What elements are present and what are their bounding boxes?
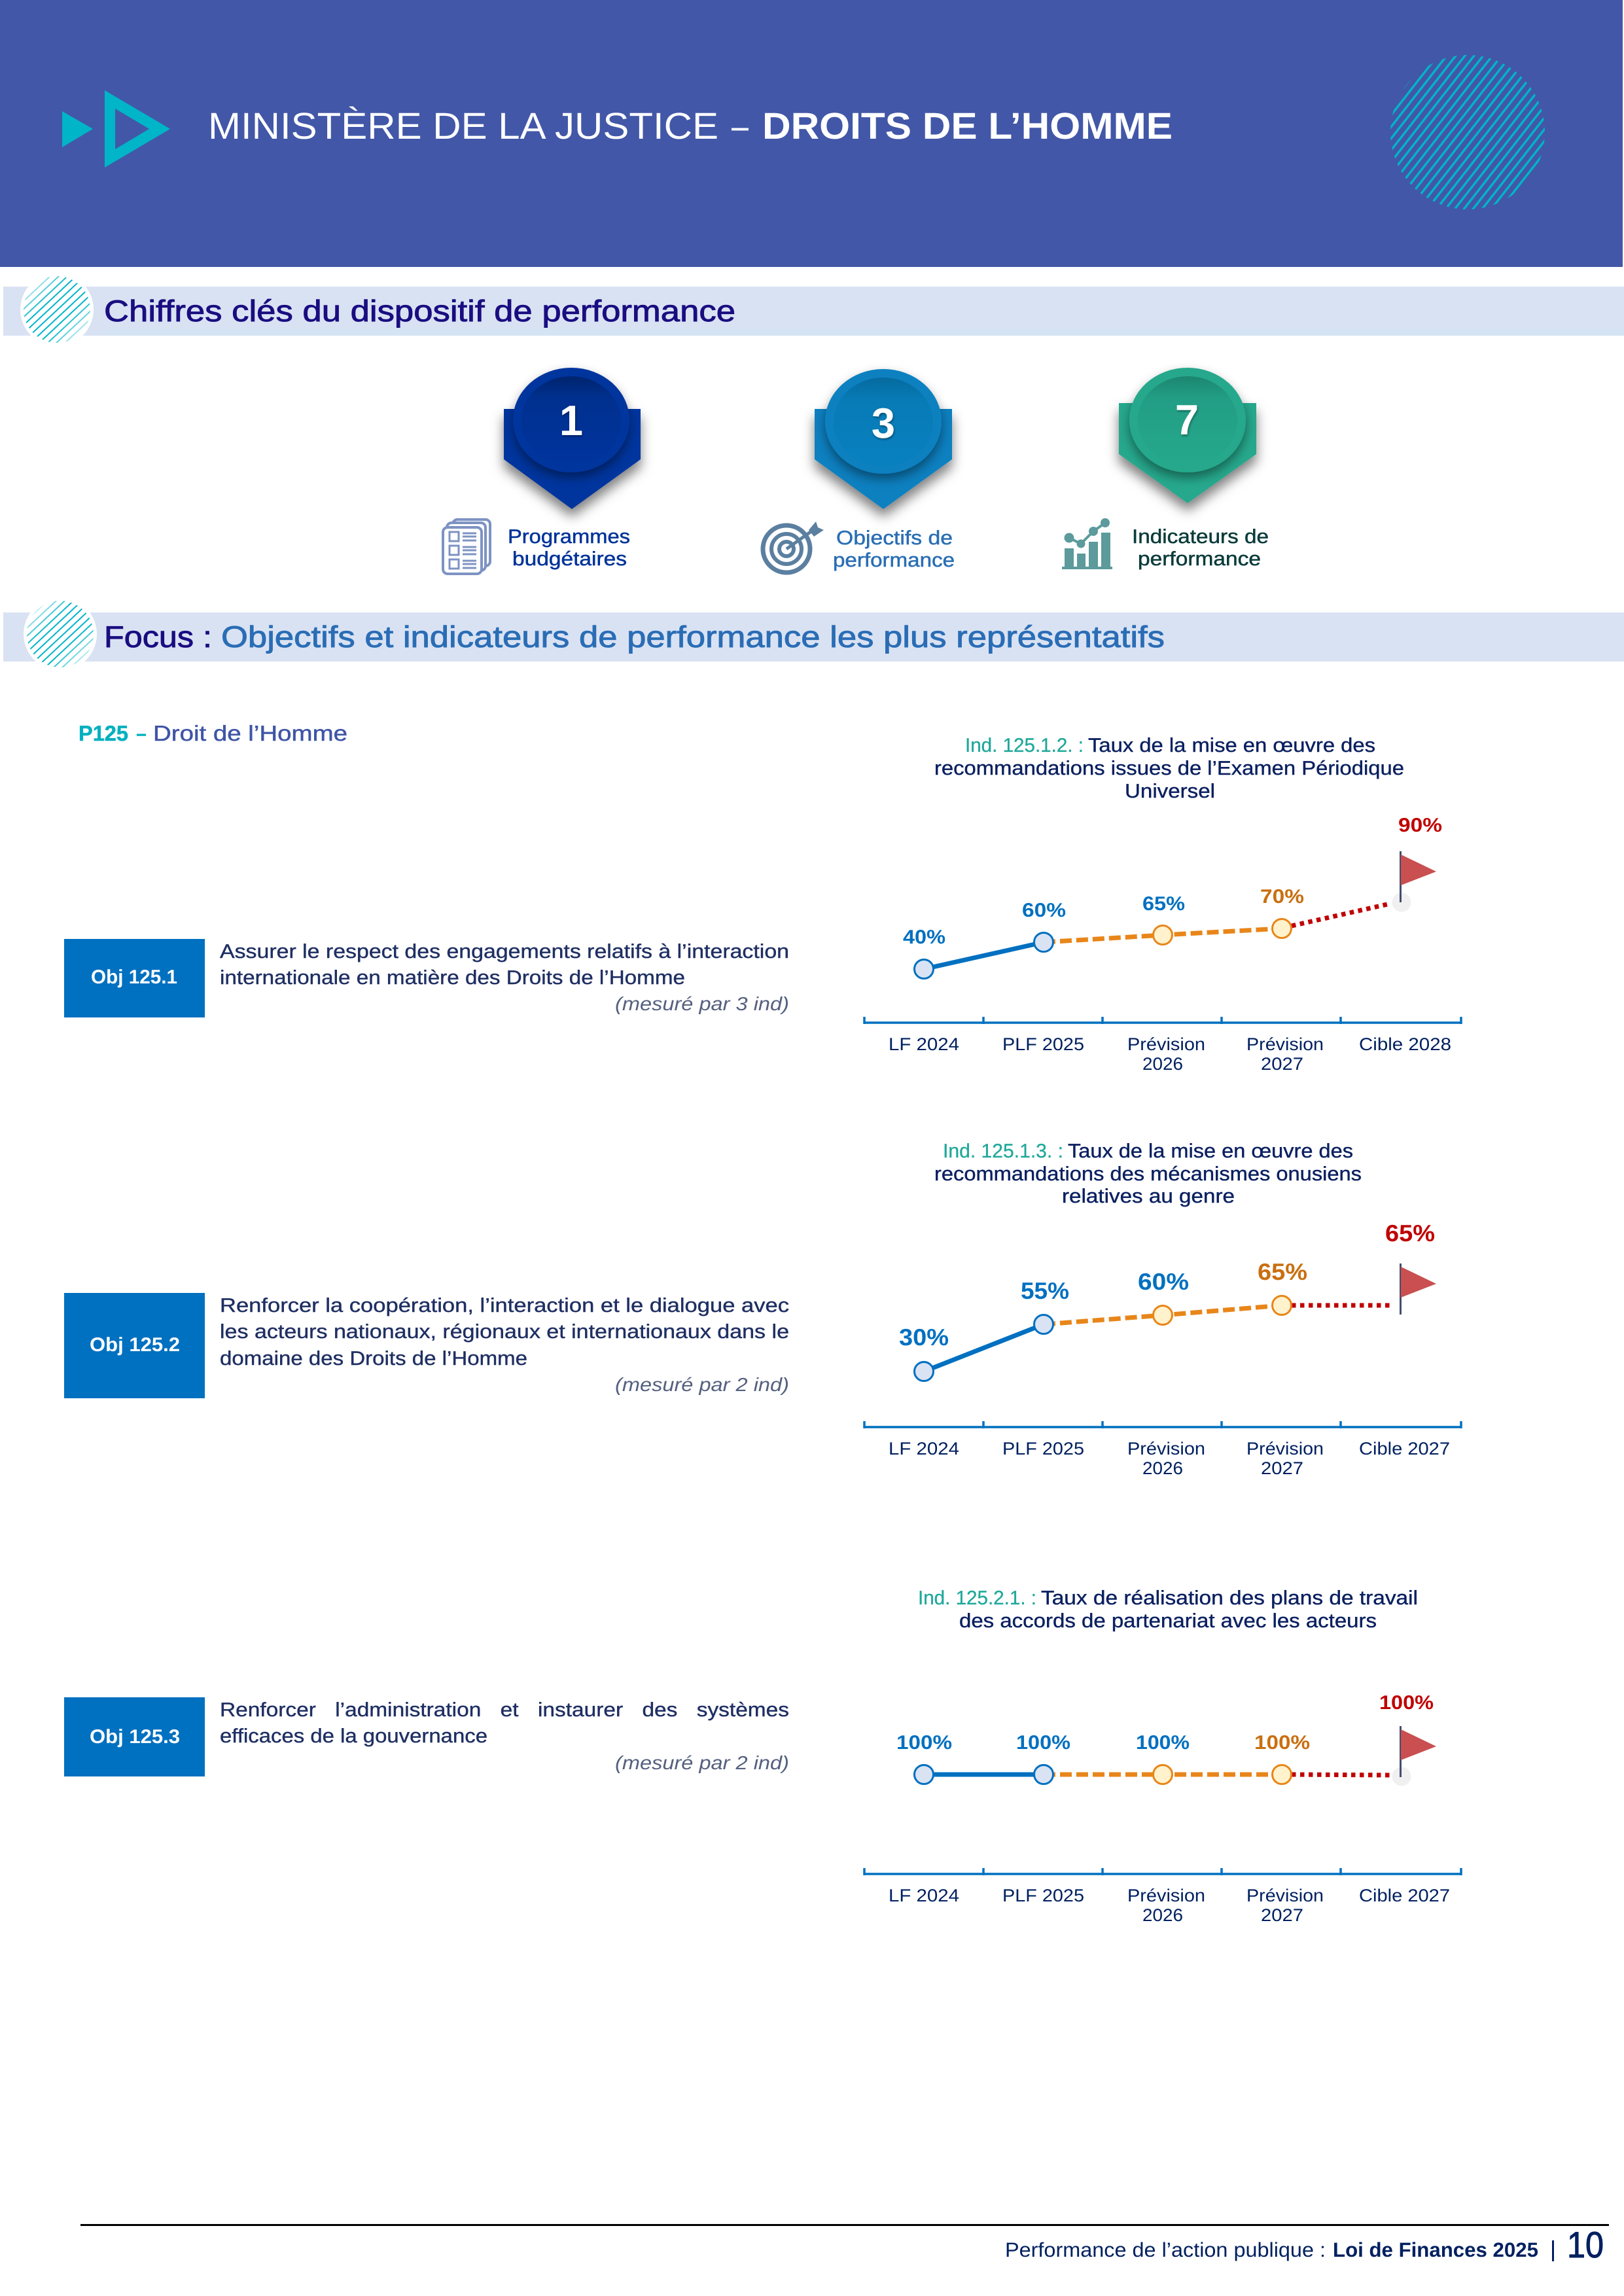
x axis: 2027 <box>1261 1458 1303 1478</box>
x axis: Prévision <box>1246 1034 1324 1054</box>
chart title <box>934 1140 1362 1207</box>
chart title: Taux de la mise en œuvre des <box>1068 1140 1353 1162</box>
chart title: Ind. 125.1.3. : <box>943 1140 1063 1162</box>
x axis: Cible 2028 <box>1359 1034 1451 1054</box>
section band: focus <box>3 597 1624 671</box>
x axis: Prévision <box>1127 1034 1205 1054</box>
objective text: Renforcer l’administration et instaurer des systèmes <box>220 1699 789 1721</box>
x axis: LF 2024 <box>889 1034 959 1054</box>
heading: Chiffres clés du dispositif de performance <box>104 294 735 328</box>
chart title: recommandations des mécanismes onusiens <box>934 1163 1362 1185</box>
x axis: Prévision <box>1246 1439 1324 1458</box>
badge: 7 indicateurs: 7 <box>1175 396 1199 444</box>
x axis: PLF 2025 <box>1002 1439 1084 1458</box>
programme heading: – <box>136 721 147 745</box>
value labels <box>899 1220 1435 1351</box>
value labels: 100% <box>896 1732 952 1754</box>
heading: Objectifs et indicateurs de performance les plus représentatifs <box>221 620 1165 654</box>
programme heading <box>79 721 347 745</box>
label: indicateurs de performance <box>1132 526 1269 570</box>
label: indicateurs de performance: Indicateurs de <box>1132 526 1269 548</box>
panel: objective 125.1: Obj 125.1 <box>91 966 177 988</box>
chart title <box>918 1587 1418 1632</box>
objective text: Renforcer la coopération, l’interaction et le dialogue avec <box>220 1295 789 1316</box>
data points <box>915 919 1292 979</box>
objective text <box>220 1699 789 1774</box>
x axis: PLF 2025 <box>1002 1886 1084 1905</box>
x axis <box>864 1017 1462 1074</box>
x axis: Cible 2027 <box>1359 1886 1450 1905</box>
x axis: LF 2024 <box>889 1886 959 1905</box>
icon: target <box>763 521 824 573</box>
value labels: 70% <box>1260 886 1304 908</box>
panel: objective 125.2 <box>64 1293 789 1398</box>
value labels: 60% <box>1138 1268 1189 1295</box>
page number: 10 <box>1567 2224 1604 2265</box>
objective text: efficaces de la gouvernance <box>220 1725 487 1747</box>
panel: objective 125.3 <box>64 1697 789 1776</box>
header banner <box>0 0 1623 267</box>
x axis: 2026 <box>1142 1054 1183 1074</box>
title: – <box>732 105 749 147</box>
chart title: Taux de réalisation des plans de travail <box>1041 1587 1418 1609</box>
chart title: Taux de la mise en œuvre des <box>1088 735 1375 756</box>
value labels: 90% <box>1398 815 1442 836</box>
icon: target flag <box>1400 1263 1436 1315</box>
label: programmes budgétaires: budgétaires <box>512 548 627 570</box>
footer: Performance de l’action publique : <box>1005 2238 1326 2261</box>
label: programmes budgétaires: Programmes <box>508 526 630 548</box>
badge: 1 programme: 1 <box>559 397 583 444</box>
objective text: domaine des Droits de l’Homme <box>220 1348 527 1369</box>
icon: hatched disc <box>24 597 97 671</box>
icon: hatched circle <box>1390 55 1545 209</box>
badge: 3 objectifs: 3 <box>872 399 895 447</box>
line series <box>924 1767 1411 1786</box>
x axis: 2026 <box>1142 1905 1183 1925</box>
value labels <box>903 815 1442 948</box>
value labels: 65% <box>1258 1258 1307 1285</box>
label: objectifs de performance <box>833 527 955 571</box>
x axis: Cible 2027 <box>1359 1439 1450 1458</box>
value labels: 65% <box>1385 1220 1435 1246</box>
label: indicateurs de performance: performance <box>1138 548 1261 570</box>
value labels: 55% <box>1021 1277 1069 1304</box>
x axis: 2026 <box>1142 1458 1183 1478</box>
chart title: Ind. 125.1.2. : <box>965 735 1084 756</box>
x axis: PLF 2025 <box>1002 1034 1084 1054</box>
x axis: Prévision <box>1127 1886 1205 1905</box>
icon: target flag <box>1400 1726 1436 1777</box>
panel: objective 125.2: Obj 125.2 <box>90 1334 180 1356</box>
data points <box>915 1765 1292 1784</box>
objective text: Assurer le respect des engagements relatifs à l’interaction <box>220 941 789 963</box>
value labels: 65% <box>1142 893 1185 915</box>
objective text: (mesuré par 2 ind) <box>615 1753 789 1774</box>
value labels: 100% <box>1016 1732 1070 1754</box>
value labels: 100% <box>1254 1732 1310 1754</box>
panel: objective 125.3: Obj 125.3 <box>90 1726 180 1748</box>
icon: bar chart with trend <box>1062 518 1112 569</box>
label: objectifs de performance: Objectifs de <box>836 527 953 549</box>
programme heading: Droit de l’Homme <box>153 721 347 745</box>
line series <box>924 892 1411 969</box>
label: programmes budgétaires <box>508 526 630 570</box>
badge: 7 indicateurs <box>1119 368 1256 503</box>
panel: objective 125.1 <box>64 939 789 1017</box>
line series <box>924 1305 1394 1371</box>
objective text <box>220 941 789 1015</box>
title: DROITS DE L’HOMME <box>762 105 1173 147</box>
icon: hatched disc <box>20 273 94 346</box>
icon: play arrows <box>62 90 170 168</box>
icon: target flag <box>1400 851 1436 902</box>
chart title <box>934 735 1404 802</box>
x axis: Prévision <box>1246 1886 1324 1905</box>
data points <box>915 1296 1292 1381</box>
objective text: internationale en matière des Droits de l’Homme <box>220 967 685 989</box>
icon: documents checklist <box>443 520 490 574</box>
objective text <box>220 1295 789 1396</box>
footer: Loi de Finances 2025 <box>1333 2238 1538 2261</box>
heading: Focus : <box>104 620 212 654</box>
chart: indicator 125.1.3 <box>864 1140 1462 1478</box>
chart title: des accords de partenariat avec les acteurs <box>959 1610 1377 1632</box>
value labels <box>896 1692 1434 1754</box>
value labels: 60% <box>1022 900 1066 921</box>
footer <box>80 2224 1609 2265</box>
value labels: 40% <box>903 927 945 948</box>
objective text: les acteurs nationaux, régionaux et internationaux dans le <box>220 1321 789 1343</box>
x axis: LF 2024 <box>889 1439 959 1458</box>
chart: indicator 125.2.1 <box>864 1587 1462 1925</box>
chart: indicator 125.1.2 <box>864 735 1462 1074</box>
objective text: (mesuré par 3 ind) <box>615 994 789 1015</box>
label: objectifs de performance: performance <box>833 550 955 571</box>
chart title: relatives au genre <box>1062 1186 1235 1207</box>
badge: 1 programme <box>504 368 641 509</box>
title <box>208 105 1173 147</box>
value labels: 100% <box>1136 1732 1190 1754</box>
x axis: Prévision <box>1127 1439 1205 1458</box>
badge: 3 objectifs <box>815 369 952 509</box>
programme heading: P125 <box>79 721 128 745</box>
x axis <box>864 1421 1462 1478</box>
title: MINISTÈRE DE LA JUSTICE <box>208 105 718 147</box>
value labels: 100% <box>1379 1692 1434 1714</box>
x axis: 2027 <box>1261 1054 1303 1074</box>
objective text: (mesuré par 2 ind) <box>615 1375 789 1396</box>
section band: chiffres clés <box>3 273 1624 346</box>
chart title: Universel <box>1125 781 1215 802</box>
value labels: 30% <box>899 1324 949 1351</box>
x axis <box>864 1868 1462 1925</box>
chart title: recommandations issues de l’Examen Périodique <box>934 758 1404 779</box>
chart title: Ind. 125.2.1. : <box>918 1587 1036 1609</box>
x axis: 2027 <box>1261 1905 1303 1925</box>
